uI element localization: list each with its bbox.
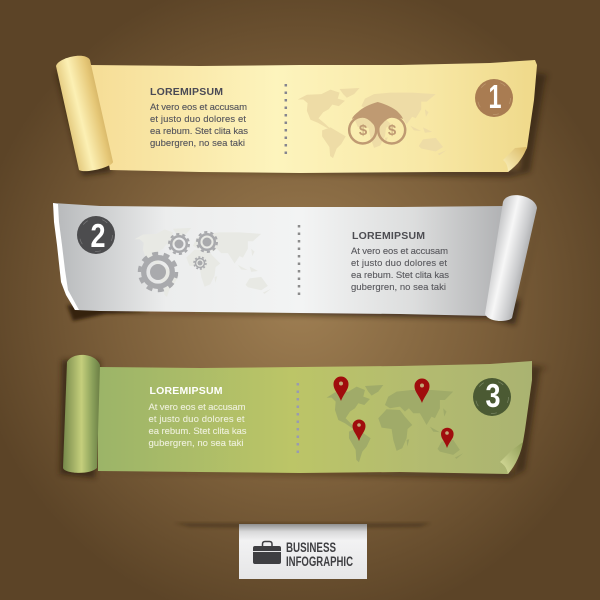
badge 2: 2	[90, 217, 106, 254]
body text: gubergren, no sea taki	[148, 438, 244, 449]
body text: et justo duo dolores et	[148, 414, 245, 425]
icon: money: $	[359, 122, 368, 139]
badge 1: 1	[488, 78, 502, 115]
shadow	[110, 72, 548, 177]
roll	[63, 355, 100, 473]
badge 2	[77, 216, 115, 254]
body text: At vero eos et accusam	[150, 102, 247, 113]
corner curl	[503, 147, 527, 172]
label: business infographic: INFOGRAPHIC	[286, 554, 353, 569]
shadow	[100, 365, 548, 478]
label: business infographic	[174, 523, 431, 579]
shadow line	[174, 523, 431, 529]
tag	[239, 524, 367, 579]
icon: money: $	[388, 122, 397, 139]
body text: et justo duo dolores et	[351, 258, 447, 269]
roll	[485, 195, 537, 321]
world map	[298, 88, 447, 158]
badge 1	[475, 78, 513, 117]
paper	[53, 203, 505, 316]
body text	[150, 102, 248, 149]
dotted divider	[285, 84, 287, 157]
dotted divider	[297, 383, 299, 455]
icon: money	[349, 102, 405, 144]
badge 3	[473, 377, 511, 416]
badge 3: 3	[486, 377, 500, 414]
body text: ea rebum. Stet clita kas	[150, 126, 248, 137]
paper	[90, 60, 537, 173]
icons: map pins	[334, 377, 454, 448]
body text	[351, 246, 449, 293]
body text	[148, 402, 247, 449]
body text: At vero eos et accusam	[351, 246, 448, 257]
panel 2: silver banner	[53, 195, 540, 325]
torn edge	[53, 203, 79, 310]
icon: gears	[140, 232, 217, 290]
heading: LOREMIPSUM	[352, 230, 425, 242]
heading: LOREMIPSUM	[150, 86, 223, 98]
panel 3: green banner	[60, 355, 548, 478]
paper	[98, 361, 532, 474]
dotted divider	[298, 225, 300, 297]
heading: LOREMIPSUM	[150, 385, 223, 397]
body text: gubergren, no sea taki	[150, 138, 245, 149]
world map	[135, 228, 271, 297]
body text: ea rebum. Stet clita kas	[351, 270, 449, 281]
world map	[327, 385, 463, 462]
roll	[56, 56, 113, 171]
body text: gubergren, no sea taki	[351, 282, 446, 293]
corner curl	[500, 442, 523, 474]
body text: et justo duo dolores et	[150, 114, 246, 125]
body text: ea rebum. Stet clita kas	[148, 426, 247, 437]
label text: BUSINESS	[286, 540, 336, 555]
shadow	[105, 215, 540, 325]
body text: At vero eos et accusam	[148, 402, 246, 413]
panel 1: yellow banner	[56, 56, 548, 177]
icon: briefcase	[253, 542, 281, 564]
